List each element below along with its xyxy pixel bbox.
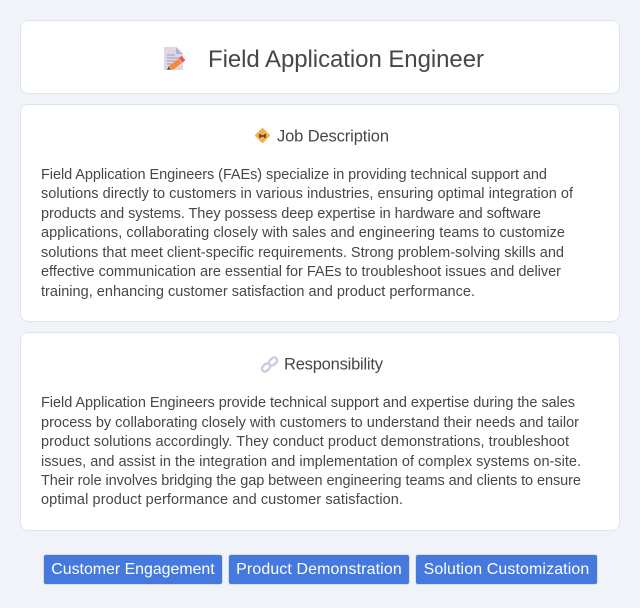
text block: responsibility xyxy=(41,395,581,508)
tag: solution customization: Solution Customization xyxy=(424,561,589,578)
tag: product demonstration xyxy=(228,554,410,585)
tag: customer engagement: Customer Engagement xyxy=(51,561,215,578)
text block: job description: training, enhancing customer satisfaction and product performance. xyxy=(41,284,475,300)
text block: responsibility: product solutions accordingly. They conduct product demonstrations, troubleshoot xyxy=(41,434,569,450)
panel: responsibility card xyxy=(20,332,620,531)
icon: document with pencil xyxy=(164,47,184,70)
text block: responsibility: Their role involves bridging the gap between engineering teams and clients to ensure xyxy=(41,473,581,489)
text block: job description: solutions directly to customers in various industries, ensuring optimal integration of xyxy=(41,186,574,202)
text block: responsibility: optimal product performance and customer satisfaction. xyxy=(41,492,403,508)
panel: job description card xyxy=(20,104,620,322)
text block: job description: effective communication are essential for FAEs to troubleshoot issues and deliver xyxy=(41,264,561,280)
text block: responsibility: Field Application Engineers provide technical support and expertise during the sales xyxy=(41,395,575,411)
tag: product demonstration: Product Demonstration xyxy=(236,561,402,578)
icon: job description diamond xyxy=(256,129,269,142)
icon: chain link xyxy=(261,356,278,373)
text block: job description: applications, collaborating closely with sales and engineering teams to customize xyxy=(41,225,565,241)
text block: responsibility: process by collaborating closely with customers to understand their needs and tailor xyxy=(41,415,579,431)
text block: responsibility: issues, and assist in the integration and implementation of complex systems on-site. xyxy=(41,454,581,470)
text block: job description: Field Application Engineers (FAEs) specialize in providing technical support and xyxy=(41,167,547,183)
text block: job description xyxy=(41,167,574,300)
tag: solution customization xyxy=(415,554,598,585)
heading: responsibility: Responsibility xyxy=(284,356,384,374)
panel: title card xyxy=(20,20,620,94)
heading: job description: Job Description xyxy=(277,128,389,146)
text block: job description: solutions that meet client-specific requirements. Strong problem-solving skills and xyxy=(41,245,564,261)
title: Field Application Engineer xyxy=(208,46,484,73)
tag: customer engagement xyxy=(43,554,223,585)
text block: job description: products and systems. They possess deep expertise in hardware and software xyxy=(41,206,541,222)
